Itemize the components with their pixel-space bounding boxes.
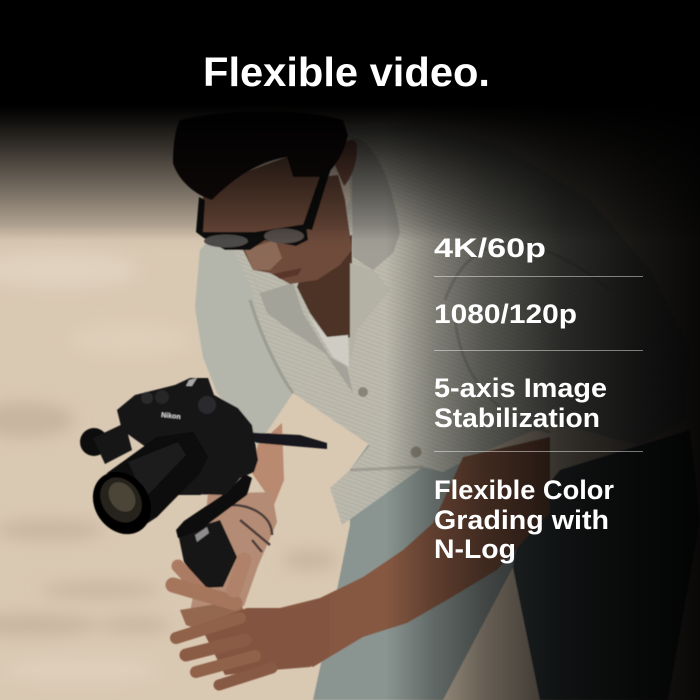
camera body	[117, 378, 258, 495]
shirt	[195, 125, 690, 525]
man	[80, 111, 700, 700]
undershirt	[307, 313, 349, 367]
feature: 5-axis Image Stabilization: 5-axis Image	[434, 373, 607, 403]
ear	[335, 140, 357, 186]
upper arm	[250, 423, 284, 505]
right lapel	[350, 263, 390, 363]
feature: Flexible Color Grading with N-Log: Grading with	[434, 505, 609, 535]
gimbal	[176, 474, 252, 588]
feature: Flexible Color Grading with N-Log	[434, 475, 614, 564]
sunglasses	[196, 165, 332, 250]
chest	[297, 235, 352, 338]
left trouser leg	[313, 440, 530, 700]
forearm right	[280, 437, 550, 667]
title: Flexible video.	[203, 49, 490, 95]
camera	[80, 378, 327, 546]
right collar	[352, 137, 400, 270]
left collar	[250, 267, 353, 393]
lens	[107, 432, 208, 530]
feature: 1080/120p: 1080/120p	[434, 299, 577, 329]
left sleeve	[195, 226, 293, 445]
lower hand	[176, 595, 330, 685]
feature: 5-axis Image Stabilization	[434, 373, 607, 433]
holding hand	[173, 560, 244, 630]
nose and mouth	[245, 240, 282, 270]
hair	[173, 111, 348, 200]
feature: Flexible Color Grading with N-Log: Flexible Color	[434, 475, 614, 505]
face	[200, 157, 352, 284]
right trouser leg	[513, 430, 700, 700]
button	[358, 387, 368, 397]
feature: 4K/60p: 4K/60p	[434, 233, 546, 263]
feature list	[434, 233, 643, 564]
feature: 5-axis Image Stabilization: Stabilization	[434, 403, 600, 433]
flip screen	[240, 432, 327, 449]
brand label: Nikon	[161, 412, 181, 421]
feature: Flexible Color Grading with N-Log: N-Log	[434, 534, 516, 564]
tattooed forearm	[190, 492, 277, 612]
